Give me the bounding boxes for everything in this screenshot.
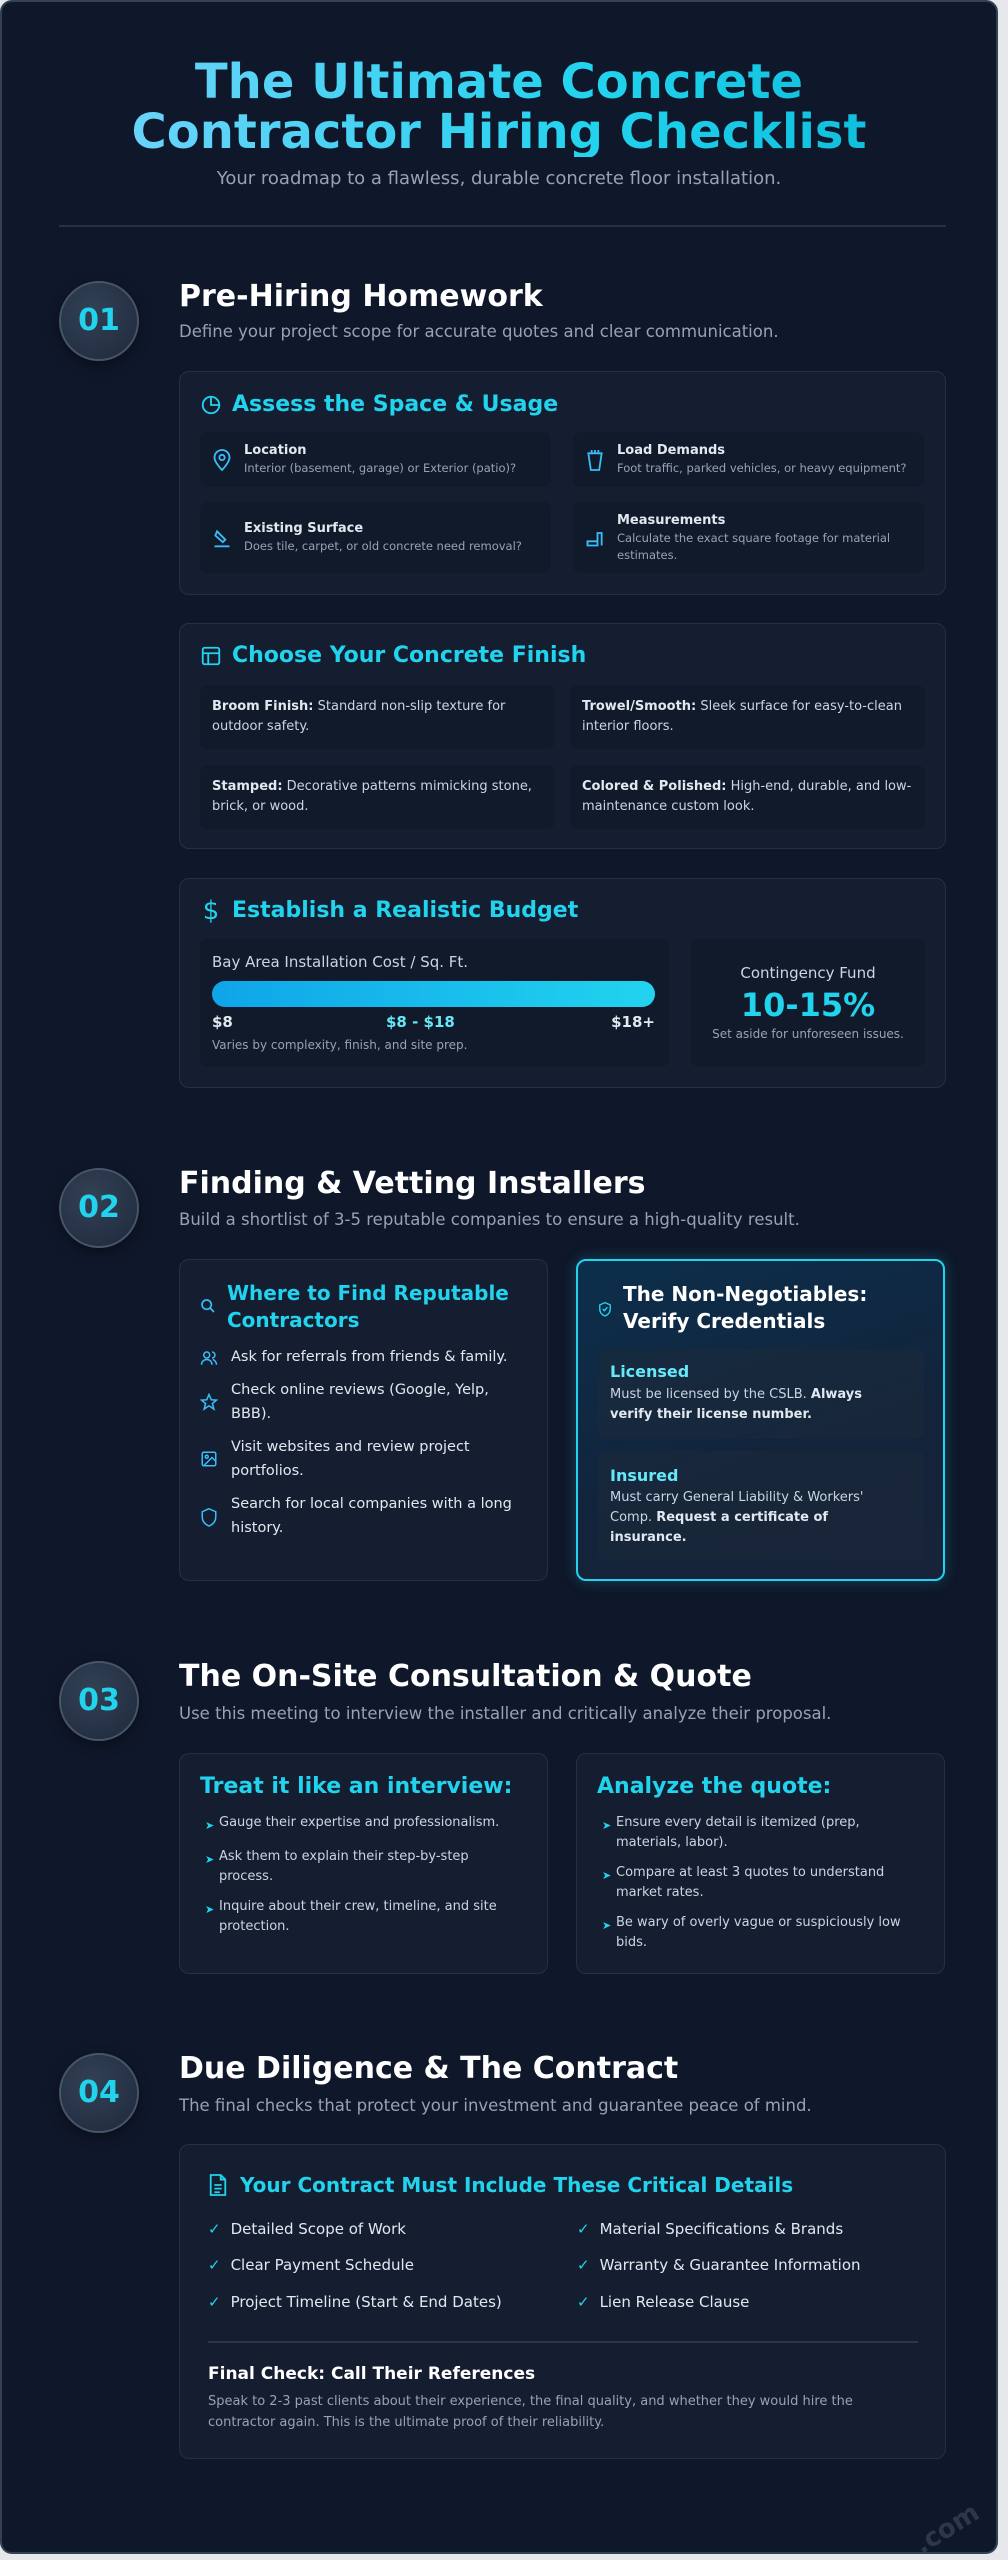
panel: concrete finish (179, 623, 946, 849)
heading: analyze: Analyze the quote: (597, 1774, 831, 1799)
item: measurements: Calculate the exact square footage for material estimates. (617, 530, 890, 562)
heading: where to find (201, 1281, 509, 1332)
section 02 subtitle: Build a shortlist of 3-5 reputable companies to ensure a high-quality result. (179, 1210, 800, 1229)
panel: analyze quote: ➤ (602, 1869, 611, 1882)
checklist: ✓ Warranty & Guarantee Information (577, 2256, 861, 2274)
title: The Ultimate Concrete (195, 54, 803, 110)
panel heading: finish: Choose Your Concrete Finish (232, 643, 586, 668)
cost range bar chart (200, 939, 669, 1067)
panel: interview: ➤ (205, 1819, 214, 1832)
heading: where to find: Where to Find Reputable (227, 1281, 509, 1305)
panel: analyze quote (576, 1753, 945, 1974)
finish: trowel: Trowel/Smooth: Sleek surface for easy-to-clean interior floors. (582, 699, 902, 734)
finish: stamped (200, 765, 555, 829)
section 02 number: 02 (78, 1190, 120, 1225)
title: Contractor Hiring Checklist (132, 104, 866, 160)
checklist: ✓ Material Specifications & Brands (577, 2220, 843, 2238)
subtitle: Your roadmap to a flawless, durable concrete floor installation. (217, 168, 781, 189)
cost range bar chart: Varies by complexity, finish, and site prep. (212, 1038, 467, 1052)
panel: analyze quote: ➤ (602, 1819, 611, 1832)
list: interview points: Gauge their expertise and professionalism. (219, 1815, 499, 1830)
callout: insured: Must carry General Liability & Workers' Comp. Request a certificate of insurance. (610, 1490, 863, 1545)
panel: assess the space (179, 371, 946, 595)
section 01 subtitle: Define your project scope for accurate quotes and clear communication. (179, 322, 779, 341)
list: sources: Ask for referrals from friends & family. (231, 1349, 508, 1365)
panel: non-negotiables (576, 1259, 945, 1581)
item: load demands (573, 432, 924, 487)
section 02 heading: Finding & Vetting Installers (179, 1166, 645, 1201)
item: existing surface: Existing Surface (244, 521, 363, 536)
checklist: ✓ Clear Payment Schedule (208, 2256, 414, 2274)
panel heading: budget: $ (203, 896, 219, 926)
panel: interview (179, 1753, 548, 1974)
panel: interview: ➤ (205, 1903, 214, 1916)
item: location: Location (244, 443, 307, 458)
callout: licensed: Must be licensed by the CSLB. Always verify their license number. (610, 1387, 862, 1422)
list: interview points (205, 1815, 499, 1934)
section 04 heading: Due Diligence & The Contract (179, 2051, 678, 2086)
heading: interview: Treat it like an interview: (200, 1774, 512, 1799)
section 03 number: 03 (78, 1683, 120, 1718)
cost range bar chart: $8 (212, 1013, 233, 1031)
finish: broom (200, 685, 555, 749)
finish: stamped: Stamped: Decorative patterns mimicking stone, brick, or wood. (212, 779, 532, 814)
item: existing surface (200, 502, 551, 573)
finish: trowel (570, 685, 925, 749)
heading: verify credentials: Verify Credentials (623, 1309, 825, 1333)
section 04 number: 04 (78, 2075, 120, 2110)
section 01 heading: Pre-Hiring Homework (179, 279, 543, 314)
contingency fund stat: Contingency Fund (740, 964, 876, 982)
list: quote points (602, 1815, 901, 1950)
section 01 number: 01 (78, 303, 120, 338)
list: interview points: Inquire about their crew, timeline, and site protection. (219, 1899, 497, 1934)
contingency fund stat (691, 939, 925, 1067)
list: quote points: Be wary of overly vague or suspiciously low bids. (616, 1915, 901, 1950)
item: measurements (573, 502, 924, 573)
heading: verify credentials: The Non-Negotiables: (623, 1282, 867, 1306)
final check callout (208, 2364, 853, 2430)
cost range bar chart: $8 - $18 (386, 1013, 455, 1031)
list: quote points: Compare at least 3 quotes to understand market rates. (616, 1865, 884, 1900)
checklist (208, 2220, 861, 2311)
callout: licensed (598, 1349, 924, 1439)
heading: contract: Your Contract Must Include These Critical Details (240, 2173, 793, 2197)
list: interview points: Ask them to explain their step-by-step process. (219, 1849, 469, 1884)
final check callout: Final Check: Call Their References (208, 2364, 535, 2384)
contingency fund stat: Set aside for unforeseen issues. (712, 1027, 904, 1041)
cost range bar chart: Bay Area Installation Cost / Sq. Ft. (212, 953, 468, 971)
panel heading: budget: Establish a Realistic Budget (232, 898, 578, 923)
section 03 heading: The On-Site Consultation & Quote (179, 1659, 752, 1694)
item: load demands: Foot traffic, parked vehicles, or heavy equipment? (617, 461, 907, 475)
finish: colored (570, 765, 925, 829)
contingency fund stat: 10-15% (741, 986, 875, 1024)
section 04 subtitle: The final checks that protect your investment and guarantee peace of mind. (179, 2096, 812, 2115)
item: location (200, 432, 551, 487)
section 04 number (59, 2053, 139, 2133)
panel: where to find (179, 1259, 548, 1581)
finish: colored: Colored & Polished: High-end, durable, and low-maintenance custom look. (582, 779, 911, 814)
final check callout: Speak to 2-3 past clients about their experience, the final quality, and whether they would hire the contractor again. This is the ultimate proof of their reliability. (208, 2394, 853, 2430)
panel: analyze quote: ➤ (602, 1919, 611, 1932)
checklist: ✓ Lien Release Clause (577, 2293, 749, 2311)
panel: contract details (179, 2144, 946, 2459)
callout: licensed: Licensed (610, 1362, 689, 1381)
title (2, 57, 996, 157)
finish: broom: Broom Finish: Standard non-slip texture for outdoor safety. (212, 699, 505, 734)
heading: where to find: Contractors (227, 1308, 360, 1332)
panel: interview: ➤ (205, 1853, 214, 1866)
checklist: ✓ Project Timeline (Start & End Dates) (208, 2293, 502, 2311)
callout: insured (598, 1451, 924, 1560)
callout: insured: Insured (610, 1466, 678, 1485)
list: quote points: Ensure every detail is itemized (prep, materials, labor). (616, 1815, 860, 1850)
cost range bar chart: $18+ (611, 1013, 655, 1031)
panel heading: assess: Assess the Space & Usage (232, 392, 558, 417)
panel: budget (179, 878, 946, 1088)
section 03 subtitle: Use this meeting to interview the installer and critically analyze their proposal. (179, 1704, 831, 1723)
item: location: Interior (basement, garage) or Exterior (patio)? (244, 461, 516, 475)
item: load demands: Load Demands (617, 443, 725, 458)
heading: verify credentials (599, 1282, 867, 1333)
item: measurements: Measurements (617, 512, 725, 528)
section 02 number (59, 1168, 139, 1248)
list: sources: Check online reviews (Google, Yelp, BBB). (231, 1382, 489, 1422)
list: sources: Visit websites and review project portfolios. (231, 1439, 470, 1478)
section 03 number (59, 1661, 139, 1741)
section 01 number (59, 281, 139, 361)
list: sources: Search for local companies with a long history. (231, 1496, 512, 1536)
list: sources (200, 1349, 512, 1536)
item: existing surface: Does tile, carpet, or old concrete need removal? (244, 539, 522, 553)
checklist: ✓ Detailed Scope of Work (208, 2220, 406, 2238)
